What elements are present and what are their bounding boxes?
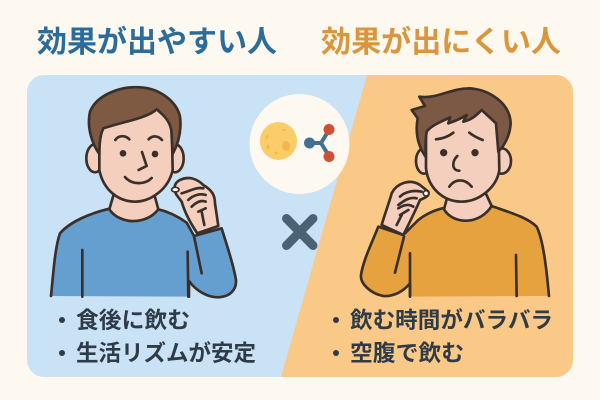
hand: [174, 178, 218, 233]
face: [426, 107, 499, 202]
eyes and brows: [440, 149, 447, 156]
sweater: [51, 209, 236, 297]
sweater: [361, 206, 549, 297]
hair: [412, 88, 511, 157]
icon: cross mark: [286, 218, 313, 246]
panel: split background: [27, 75, 573, 377]
icon: ingredient circle: [250, 94, 350, 194]
title: effective group: 効果が出やすい人: [37, 25, 277, 59]
ears: [86, 144, 104, 172]
icon: smiling man taking a supplement: [51, 87, 236, 297]
sleeve lines: [82, 250, 188, 297]
hand: [382, 182, 429, 235]
list: less effective habits: 空腹で飲む: [350, 341, 464, 366]
eyes and brows: [120, 150, 126, 157]
hair: [89, 87, 180, 154]
face: [99, 103, 173, 202]
list: less effective habits: 飲む時間がバラバラ: [350, 307, 553, 333]
neck: [109, 193, 158, 221]
icon: molecule: [304, 124, 334, 162]
neck: [444, 192, 492, 221]
list: effective habits: 食後に飲む: [76, 308, 190, 333]
list: effective habits: 生活リズムが安定: [76, 340, 256, 366]
icon: yellow granule: [260, 122, 297, 160]
icon: worried man taking a supplement: [361, 88, 549, 297]
ears: [416, 148, 432, 174]
list: less effective habits: [333, 307, 553, 366]
pill: [423, 191, 429, 196]
title: less effective group: 効果が出にくい人: [321, 25, 561, 59]
list: effective habits: [59, 308, 256, 366]
pill: [172, 187, 179, 192]
